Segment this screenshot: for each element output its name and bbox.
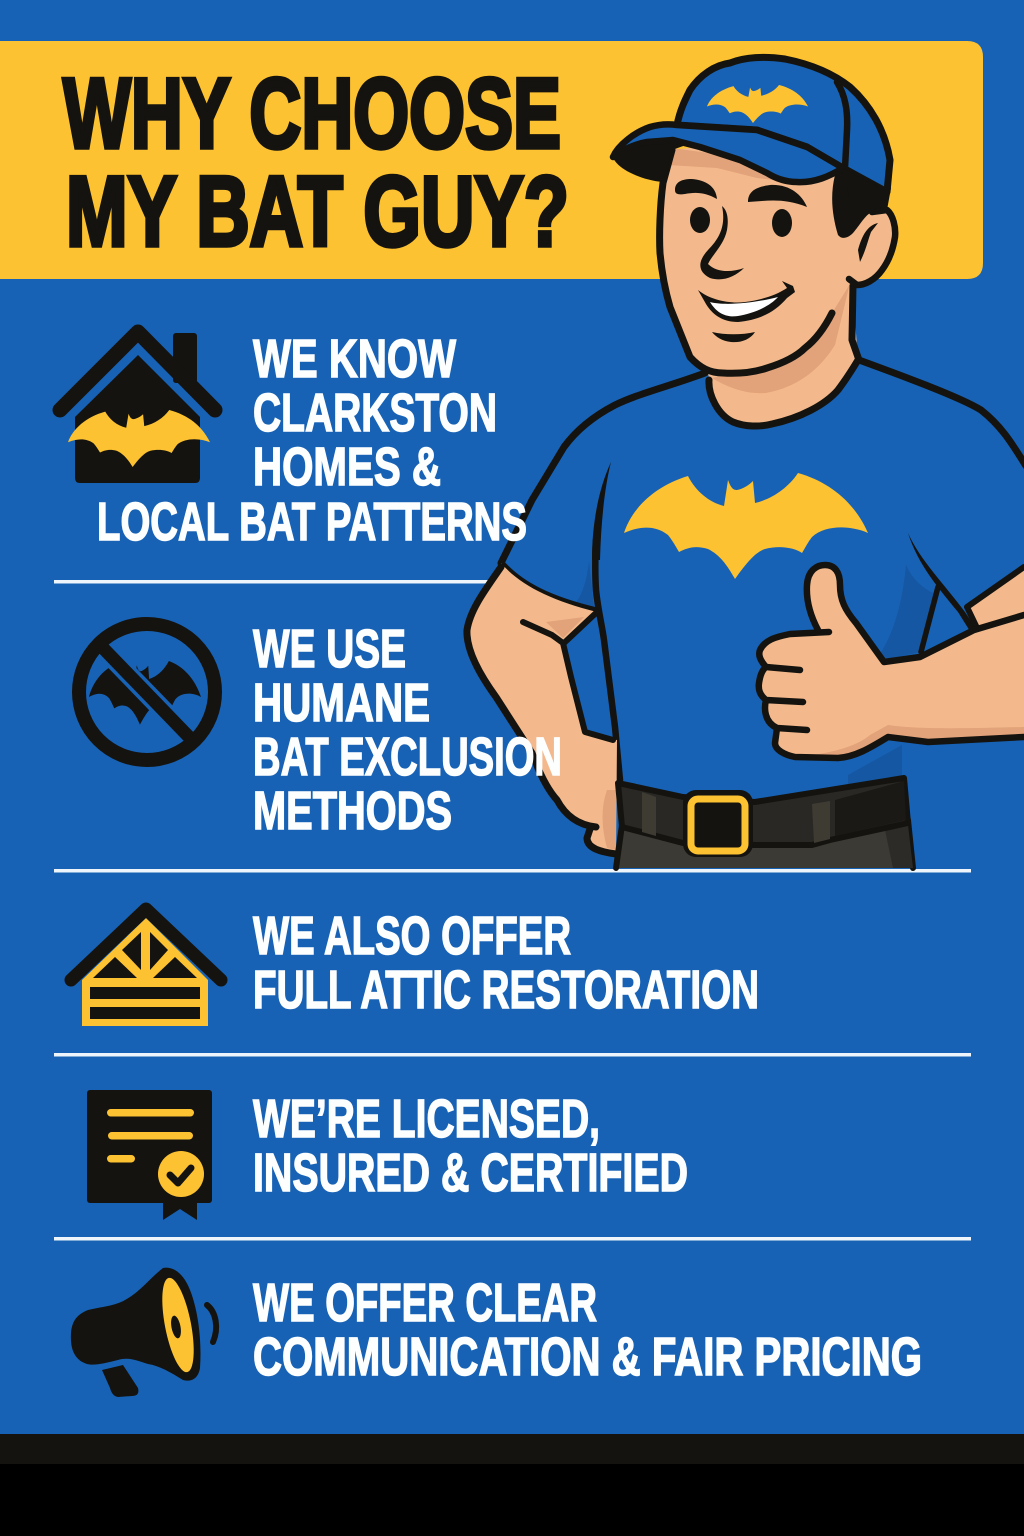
text: licensed and insured: WE’RE LICENSED,: [253, 1089, 600, 1149]
cap brim: [613, 124, 843, 182]
eyebrows: [675, 179, 807, 207]
mascot neck: [708, 280, 859, 426]
text: humane exclusion: BAT EXCLUSION: [253, 727, 562, 787]
nose: [700, 206, 744, 279]
forehead shadow: [668, 148, 790, 182]
text: Clarkston homes: WE KNOW: [253, 329, 456, 389]
mascot left arm: [467, 563, 617, 854]
text: humane exclusion: [253, 619, 562, 841]
ear: [849, 210, 895, 285]
mascot head: [660, 140, 895, 373]
text: Clarkston homes: HOMES &: [253, 437, 441, 497]
cap dome: [677, 57, 890, 192]
smile: [698, 281, 795, 322]
title: [63, 58, 569, 266]
text: attic restoration: WE ALSO OFFER: [253, 906, 571, 966]
mascot cap: [613, 57, 890, 212]
mascot: bat guy: [467, 57, 1024, 868]
title: MY BAT GUY?: [66, 156, 569, 266]
footer band: [0, 1434, 1024, 1536]
text: Clarkston homes: CLARKSTON: [253, 383, 497, 443]
chin mark: [712, 332, 755, 342]
header banner: [0, 41, 983, 279]
text: Clarkston homes: [97, 329, 527, 552]
text: attic restoration: FULL ATTIC RESTORATION: [253, 960, 759, 1020]
icon: house with bat: [60, 332, 215, 483]
dark back of cap: [842, 168, 887, 212]
brim underside: [613, 135, 700, 182]
shirt bat logo: [624, 473, 868, 579]
text: licensed and insured: INSURED & CERTIFIED: [253, 1143, 688, 1203]
text: humane exclusion: WE USE: [253, 619, 406, 679]
icon: no bat harm symbol: [79, 624, 215, 760]
mascot right arm and thumbs up: [759, 565, 1024, 758]
cap bat logo: [707, 85, 808, 123]
text: humane exclusion: HUMANE: [253, 673, 430, 733]
hair: [832, 165, 891, 238]
eyes: [690, 207, 792, 237]
text: licensed and insured: [253, 1089, 688, 1203]
dividers: [54, 580, 971, 1240]
title: WHY CHOOSE: [63, 58, 561, 168]
text: humane exclusion: METHODS: [253, 781, 452, 841]
face outline: [660, 150, 832, 373]
face: [660, 140, 895, 373]
text: communication and pricing: WE OFFER CLEAR: [253, 1273, 597, 1333]
belt buckle: [683, 790, 753, 857]
mascot shirt: [501, 360, 1024, 802]
text: Clarkston homes: LOCAL BAT PATTERNS: [97, 492, 527, 552]
icon: certificate: [87, 1090, 212, 1220]
icon: attic truss: [71, 909, 221, 1026]
text: attic restoration: [253, 906, 759, 1020]
text: communication and pricing: [253, 1273, 922, 1387]
mascot trousers and belt: [615, 778, 915, 868]
cap seam: [837, 82, 847, 168]
icon: megaphone: [71, 1268, 216, 1397]
